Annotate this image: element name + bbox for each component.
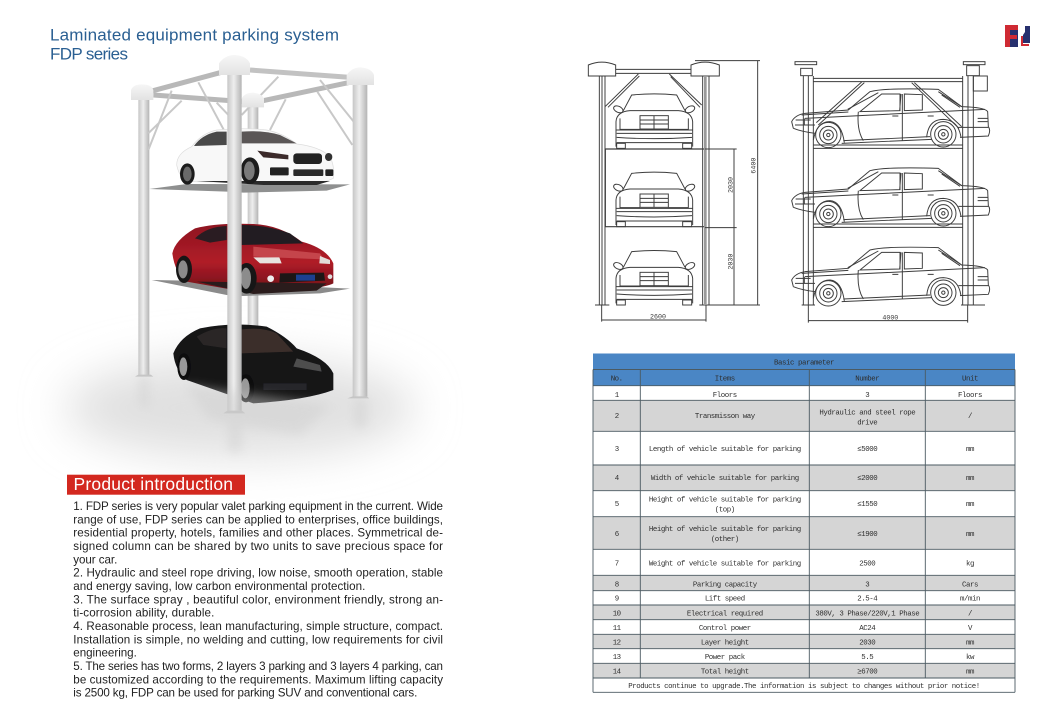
table: basic parameter (593, 354, 1015, 692)
front elevation drawing (588, 61, 760, 322)
text block: product introduction list: be customized according to the requirements. Maximum lifting capacity (73, 673, 443, 686)
row 9: 2.5-4 (857, 596, 878, 604)
text block: product introduction list: is 2500 kg, FDP can be used for parking SUV and conventional cars. (73, 687, 417, 700)
side car middle (792, 168, 990, 227)
row 2: / (968, 413, 973, 421)
row 14 (613, 668, 975, 676)
row 11 (613, 625, 973, 633)
dimension labels front view: 6400 (749, 158, 757, 174)
row 13: 5.5 (861, 654, 873, 662)
row 5: ≤1550 (857, 501, 877, 509)
row 7: Weight of vehicle suitable for parking (649, 560, 801, 568)
row 11: 11 (613, 625, 622, 633)
dimension line and label: 4000 (882, 313, 898, 321)
row 7: 2500 (859, 560, 875, 568)
row 12: 12 (613, 640, 621, 648)
front car bottom (613, 250, 696, 305)
text block: product introduction list: range of use, FDP series can be applied to enterprises, office buildings, (73, 513, 443, 526)
row 13: kw (966, 654, 975, 662)
text block: product introduction list: Installation is simple, no welding and cutting, low requirements for civil (73, 633, 443, 646)
text block: product introduction list: and energy saving, low carbon environmental protection. (73, 580, 365, 593)
row 1: Floors (713, 392, 737, 400)
row 1: 1 (615, 392, 620, 400)
row 10: 10 (613, 610, 621, 618)
row 6: 6 (615, 531, 619, 539)
row 3: mm (966, 446, 975, 454)
row 12: Layer height (701, 640, 749, 648)
row 12 (613, 640, 975, 648)
title: Laminated equipment parking system (50, 26, 339, 44)
table footer note: Products continue to upgrade.The information is subject to changes without prior notice! (628, 683, 980, 691)
table backgrounds (593, 354, 1015, 678)
black car (173, 325, 333, 403)
row 3 (615, 446, 975, 454)
row 2: Hydraulic and steel rope (819, 410, 915, 418)
row 6 (615, 526, 975, 544)
row 1 (615, 392, 982, 400)
row 14: ≥6700 (857, 668, 877, 676)
logo (1005, 23, 1030, 47)
row 8 (615, 582, 978, 590)
text block: product introduction list: 2. Hydraulic and steel rope driving, low noise, smooth operation, stable (73, 567, 443, 580)
row 4: mm (966, 475, 975, 483)
right pillar (347, 67, 374, 398)
dimension labels front view: 2600 (650, 312, 666, 320)
row 7: 7 (615, 560, 619, 568)
dimension labels front view (650, 158, 757, 320)
row 9 (615, 596, 980, 604)
product photo: three-floor parking tower with cars (131, 55, 374, 413)
posts and frame (795, 62, 987, 305)
row 3: ≤5000 (857, 446, 877, 454)
row 8: 8 (615, 582, 619, 590)
row 2 (615, 410, 973, 428)
table header row (611, 376, 978, 384)
text block: product introduction list: engineering. (73, 647, 137, 660)
front car middle (613, 172, 696, 227)
table header row: Number (855, 376, 879, 384)
text block: product introduction list: 1. FDP series is very popular valet parking equipment in the current. Wide (73, 500, 443, 513)
row 5: 5 (615, 501, 619, 509)
text block: product introduction list: 4. Reasonable process, lean manufacturing, simple structure, compact. (73, 620, 443, 633)
row 7 (615, 560, 974, 568)
row 6: ≤1900 (857, 531, 877, 539)
row 3: 3 (615, 446, 619, 454)
row 5 (615, 496, 975, 514)
row 9: m/min (960, 596, 980, 604)
rear pillars (135, 100, 258, 377)
text block: product introduction list: 5. The series has two forms, 2 layers 3 parking and 3 layers 4 parking, can (73, 660, 443, 673)
row 5: Height of vehicle suitable for parking (649, 496, 801, 504)
row 2: 2 (615, 413, 619, 421)
row 11: Control power (699, 625, 751, 633)
text block: product introduction list: your car. (73, 553, 117, 566)
row 12: mm (966, 640, 975, 648)
dimension line and label (808, 305, 968, 323)
table title: Basic parameter (774, 360, 834, 368)
row 13: Power pack (705, 654, 746, 662)
row 8: Parking capacity (693, 582, 758, 590)
red car (172, 224, 333, 294)
roof beams and braces (143, 70, 358, 150)
row 6: (other) (711, 536, 739, 544)
text block: product introduction list: residential property, hotels, families and other places. Symmetrical de- (73, 527, 443, 540)
table header row: Unit (962, 376, 978, 384)
side elevation drawing (792, 62, 990, 323)
row 11: V (968, 625, 973, 633)
row 13: 13 (613, 654, 621, 662)
white car (177, 129, 334, 185)
row 6: mm (966, 531, 975, 539)
row 12: 2030 (859, 640, 875, 648)
row 10: / (968, 610, 973, 618)
row 10: Electrical required (687, 610, 763, 618)
row 14: mm (966, 668, 975, 676)
row 14: 14 (613, 668, 622, 676)
table header row: Items (715, 376, 735, 384)
dimension labels front view: 2030 (727, 177, 735, 193)
row 4: 4 (615, 475, 620, 483)
text block: product introduction list: ti-corrosion ability, durable. (73, 607, 214, 620)
title (50, 26, 339, 64)
row 10 (613, 610, 973, 618)
row 9: 9 (615, 596, 619, 604)
floor shadow under tower (65, 358, 415, 458)
row 9: Lift speed (705, 596, 745, 604)
row 5: (top) (715, 506, 735, 514)
table header row: No. (611, 376, 623, 384)
row 10: 380V, 3 Phase/220V,1 Phase (815, 610, 919, 618)
platform 2 (152, 280, 350, 296)
title: FDP series (50, 44, 128, 64)
text block: product introduction list: signed column can be shared by two units to save precious space for (73, 540, 443, 553)
row 8: Cars (962, 582, 978, 590)
front pillar (219, 55, 250, 413)
row 4: Width of vehicle suitable for parking (651, 475, 799, 483)
dimension labels front view: 2030 (727, 254, 735, 270)
row 7: kg (966, 560, 974, 568)
row 2: Transmisson way (695, 413, 756, 421)
dimension lines (602, 61, 760, 322)
row 8: 3 (865, 582, 869, 590)
posts, caps and beam (588, 62, 719, 305)
row 4: ≤2000 (857, 475, 877, 483)
heading: product introduction: Product introduction (74, 474, 233, 494)
row 4 (615, 475, 975, 483)
platform 1 (149, 184, 350, 193)
front car top (613, 94, 696, 148)
text block: product introduction list (73, 500, 443, 700)
rear caps (131, 84, 264, 107)
side car bottom (792, 247, 990, 306)
text block: product introduction list: 3. The surface spray , beautiful color, environment friendly, strong an- (73, 593, 443, 606)
row 11: AC24 (859, 625, 876, 633)
row 3: Length of vehicle suitable for parking (649, 446, 801, 454)
row 1: Floors (958, 392, 982, 400)
pillar reflections on the floor (139, 376, 367, 452)
row 5: mm (966, 501, 975, 509)
row 2: drive (857, 420, 877, 428)
row 6: Height of vehicle suitable for parking (649, 526, 801, 534)
row 1: 3 (865, 392, 869, 400)
row 13 (613, 654, 975, 662)
side car top (792, 89, 990, 148)
row 14: Total height (701, 668, 749, 676)
